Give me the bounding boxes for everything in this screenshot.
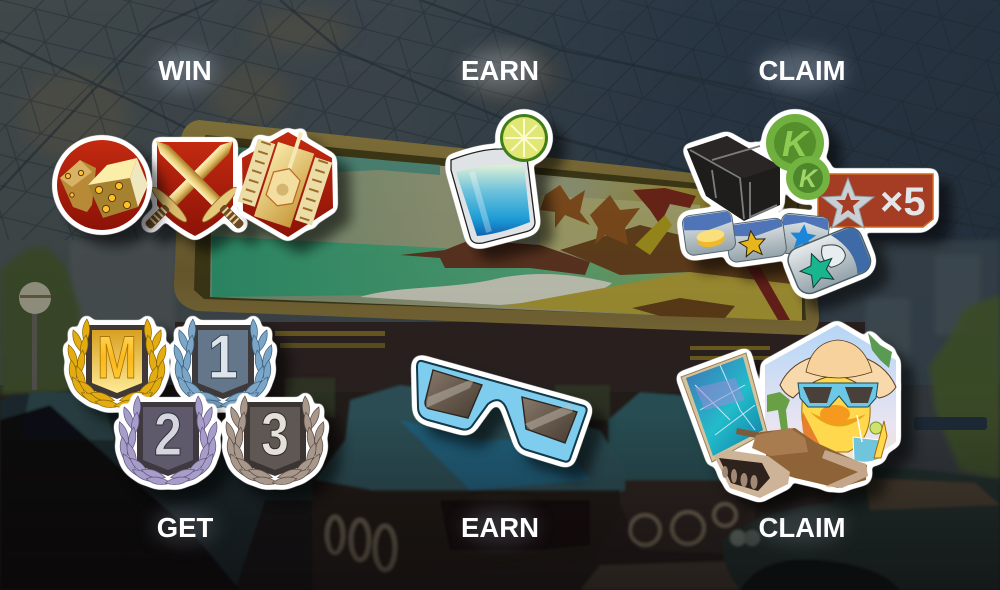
road [580,560,760,590]
gun [286,132,303,173]
left tank [0,388,312,590]
turret [264,164,303,210]
right track [295,157,332,225]
billboard frame [174,120,819,335]
red hexagon [242,132,333,237]
right tree [930,295,1000,480]
icon: crossed swords shield [130,124,259,244]
token: fourth [784,224,874,297]
duck body [802,376,870,452]
icon: master medal [65,319,169,410]
lower vehicles [0,378,1000,590]
gun [736,428,762,439]
heading: WIN [153,50,217,90]
token: first [681,210,737,256]
left dark diagonal shadow [0,405,240,590]
foliage behind tanks [285,378,335,418]
heading: EARN bottom: EARN [461,512,539,543]
numeral: 1 [208,323,238,392]
painting: island [400,240,590,275]
duck shirt [802,412,820,447]
warm dome patches [20,8,560,160]
letter: M [97,324,137,391]
painting: cream background behind palms [540,195,700,260]
dome lattice fine [0,0,1000,240]
drink [456,165,530,236]
left tree [0,245,82,395]
turret [752,428,808,456]
icon: cocktail [451,114,548,243]
token: second [725,217,787,263]
icon: tank hexagon [235,120,338,237]
token: third [778,213,830,258]
left track [238,139,275,207]
hexagon background [765,325,896,488]
black chest [687,136,780,221]
dome lattice beams [0,0,1000,230]
big green coin: K [782,123,811,164]
heading: GET: GET [157,512,213,543]
painting: sand [500,272,802,321]
wreath [65,319,169,410]
drink [853,415,887,462]
small green coin: K [799,165,819,193]
lime [500,114,548,162]
painting: shore rise [560,225,800,285]
heading: WIN: WIN [158,55,212,86]
hat crown [806,340,872,378]
small die [60,160,96,212]
shield [192,325,254,399]
palm right [868,333,892,368]
wreath [116,396,220,487]
frame [417,361,587,462]
icon: first class medal [171,319,275,410]
painting: teal sky [212,145,440,178]
icon: third class medal [223,396,327,487]
hazy city left [70,240,175,330]
heading: CLAIM top: CLAIM [758,55,846,86]
numeral: 2 [154,401,182,468]
wreath [171,319,275,410]
multiplier: ×5 [880,180,926,224]
numeral: 3 [261,401,289,468]
painting: sea band [212,236,760,297]
icon: second class medal [116,396,220,487]
right tank [608,392,750,490]
far track [822,450,868,488]
car [722,468,1000,590]
shield [137,402,199,476]
tank gun right [914,417,987,430]
glass highlight [472,172,489,232]
sword one [130,124,250,244]
heading: EARN top: EARN [461,55,539,86]
face [198,330,248,393]
red disc [57,140,147,230]
hull [760,428,867,488]
painting: dark red palm [633,188,696,225]
billboard painting [210,145,802,321]
wreath [223,396,327,487]
shield [244,402,306,476]
shield [86,325,148,399]
hazy city right [820,240,1000,480]
smile [810,412,866,427]
small green coin [786,156,830,200]
lamp post left [19,282,51,390]
large die [88,178,138,218]
red shield [157,142,233,236]
sword two [139,124,259,244]
crystal card [681,353,767,462]
brown tank [714,428,868,498]
hull [254,142,314,228]
hat brim [780,355,896,398]
painting: palm trunks [747,267,790,320]
lower scene base [0,385,1000,590]
big green coin [766,114,824,172]
left lens [425,370,482,418]
icon: rewards bundle [681,114,933,297]
structure under billboard [175,322,865,392]
badge x5 [818,174,933,228]
painting: palms [540,185,640,245]
painting: surf [360,274,612,305]
face [143,407,193,470]
near track [714,450,790,498]
painting: yellow frond [635,215,672,255]
duck sunglasses [798,383,878,407]
palm left [767,392,790,430]
heading: CLAIM bottom: CLAIM [758,512,846,543]
star [822,178,874,228]
painting: beach shadow [632,298,735,318]
icon: sunglasses [417,361,587,462]
icon: dice [57,140,148,230]
icon: duck and tank bundle [681,325,896,498]
pips [65,170,131,213]
glass [451,149,535,243]
centre tank [315,385,625,505]
beak [820,405,850,423]
face [250,407,300,470]
right lens [522,397,577,443]
face [92,330,142,393]
